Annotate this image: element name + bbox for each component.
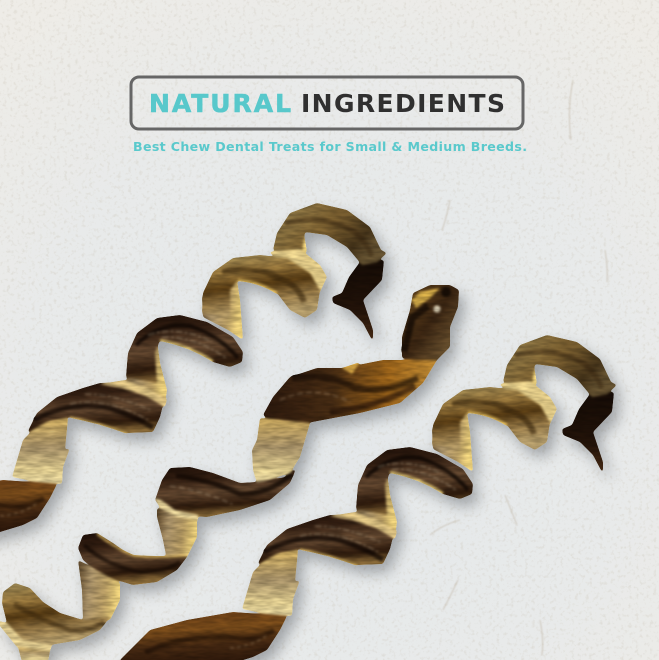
lower coil, brown: [0, 480, 57, 548]
chew stick: right twist: [120, 335, 617, 660]
lower dark coil: [155, 467, 297, 560]
pale connector: [252, 418, 310, 483]
title box: [131, 77, 523, 129]
tan end coil: [0, 560, 120, 660]
chew stick: left twist: [0, 203, 387, 548]
head end: [402, 285, 459, 360]
second coil, tan: [202, 249, 327, 340]
title: natural: NATURAL: [149, 89, 291, 118]
subtitle: Best Chew Dental Treats for Small & Medium Breeds.: [133, 139, 527, 154]
striped coil: [78, 533, 187, 585]
curled horn end with dark tip: [273, 203, 387, 342]
title: ingredients: INGREDIENTS: [301, 89, 505, 118]
fourth coil, dark and tan: [12, 380, 167, 484]
upper coil, amber: [263, 360, 437, 423]
third coil, dark striped: [126, 315, 243, 403]
chew stick: middle twist: [0, 285, 459, 660]
